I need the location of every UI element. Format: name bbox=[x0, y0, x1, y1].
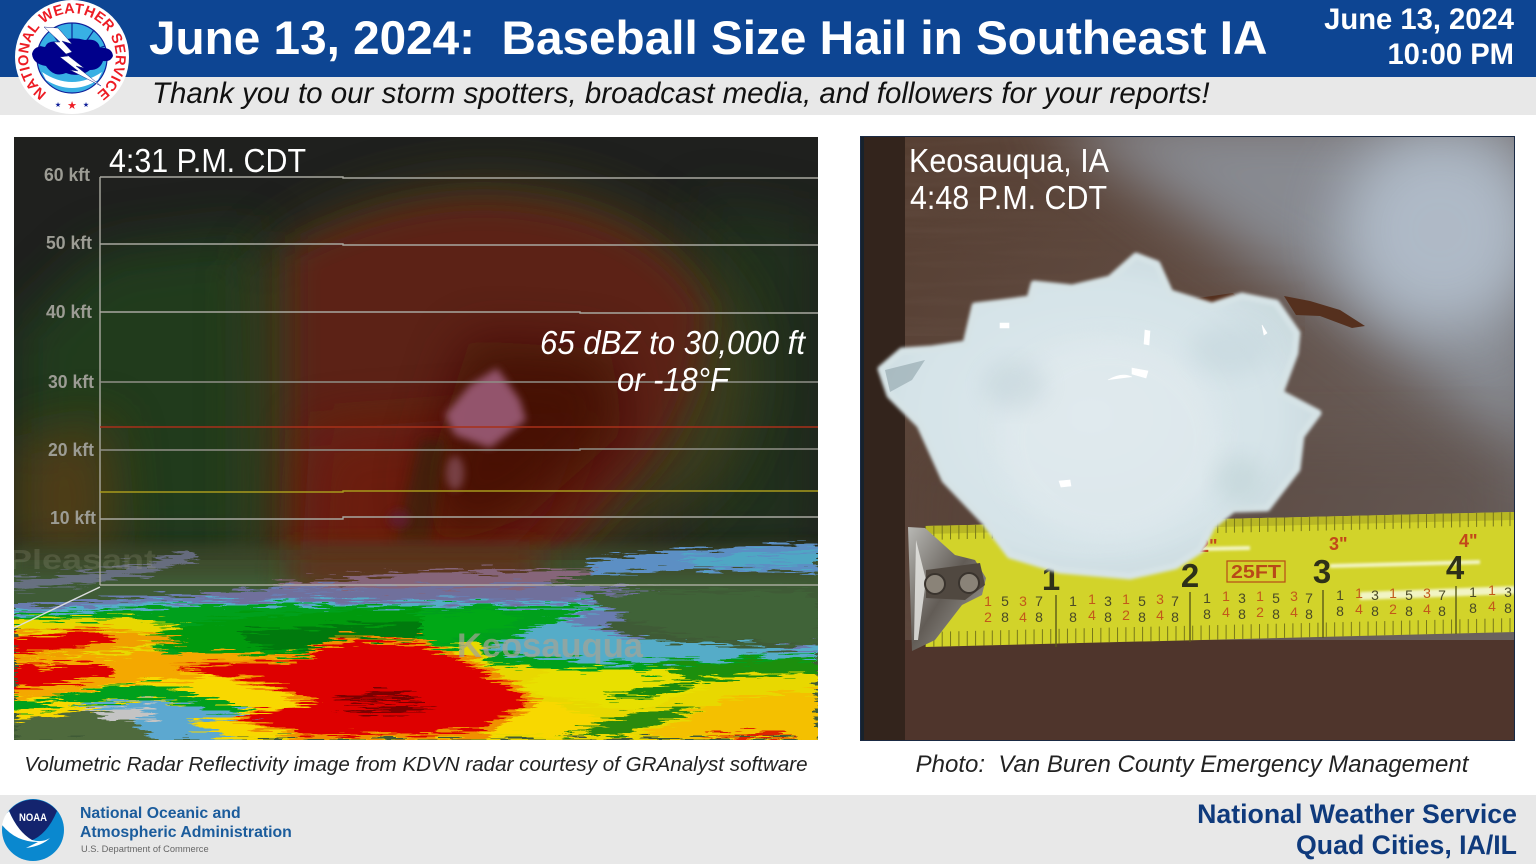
radar timestamp: 4:31 P.M. CDT bbox=[109, 142, 306, 179]
tape fractions: 8888888888888888 bbox=[1001, 600, 1512, 625]
altitude labels: 20 kft bbox=[48, 440, 94, 460]
hailstone bbox=[881, 256, 1318, 576]
tape inch marks: 4" bbox=[1459, 531, 1478, 551]
altitude grid bbox=[14, 177, 818, 628]
photo location and time: 4:48 P.M. CDT bbox=[910, 179, 1107, 216]
radar annotation: or -18°F bbox=[617, 361, 731, 398]
tape inch numbers: 2 bbox=[1181, 557, 1199, 594]
volumetric reflectivity haze bbox=[14, 180, 818, 590]
tape inch marks: 2" bbox=[1199, 536, 1218, 556]
icon: NOAA logo: NOAA bbox=[19, 812, 47, 824]
tape fractions: 131131131131 bbox=[984, 582, 1496, 609]
altitude labels: 30 kft bbox=[48, 372, 94, 392]
subtitle bar bbox=[0, 77, 1536, 115]
panel: radar reflectivity image bbox=[14, 137, 818, 740]
title: June 13, 2024: Baseball Size Hail in Southeast IA bbox=[149, 12, 1267, 65]
photo frame bbox=[860, 136, 1514, 740]
panel: hailstone photo bbox=[860, 136, 1515, 741]
tape inch numbers bbox=[1042, 549, 1465, 597]
tape fractions bbox=[984, 582, 1512, 625]
tape fractions: 5713571357135713 bbox=[1001, 584, 1512, 609]
footer bar bbox=[0, 795, 1536, 864]
tape inch numbers: 4 bbox=[1446, 549, 1465, 586]
icon: National Weather Service logo: ★ bbox=[55, 101, 61, 109]
photo location and time: Keosauqua, IA bbox=[909, 142, 1109, 179]
tape tick marks bbox=[925, 512, 1515, 540]
header banner bbox=[0, 0, 1536, 77]
tape inch marks bbox=[1199, 531, 1478, 556]
radar caption: Volumetric Radar Reflectivity image from KDVN radar courtesy of GRAnalyst software bbox=[24, 753, 808, 776]
radar annotation bbox=[540, 324, 807, 398]
icon: NOAA logo bbox=[2, 799, 64, 861]
office name: National Weather Service Quad Cities, IA/IL bbox=[1197, 799, 1517, 860]
photo location and time bbox=[909, 142, 1109, 216]
subtitle: Thank you to our storm spotters, broadcast media, and followers for your reports! bbox=[152, 77, 1210, 110]
base reflectivity ground map bbox=[14, 543, 820, 742]
altitude labels: 10 kft bbox=[50, 508, 96, 528]
tape measure bbox=[908, 512, 1515, 651]
tape 25FT badge: 25FT bbox=[1231, 562, 1281, 582]
tape 25FT badge bbox=[1227, 561, 1285, 582]
NOAA agency name: National Oceanic and Atmospheric Administration bbox=[80, 805, 292, 840]
tape metal hook bbox=[908, 527, 986, 651]
tape inch numbers: 1 bbox=[1042, 560, 1060, 597]
icon: National Weather Service logo: NATIONAL WEATHER SERVICE bbox=[18, 3, 126, 100]
altitude labels bbox=[44, 165, 96, 528]
altitude labels: 60 kft bbox=[44, 165, 90, 185]
tape inch marks: 3" bbox=[1329, 534, 1348, 554]
core of high reflectivity bbox=[388, 368, 526, 528]
altitude labels: 50 kft bbox=[46, 233, 92, 253]
icon: National Weather Service logo: ★ bbox=[67, 99, 77, 112]
icon: National Weather Service logo: ★ bbox=[83, 101, 89, 109]
date and time: June 13, 2024 10:00 PM bbox=[1324, 4, 1514, 71]
photo caption: Photo: Van Buren County Emergency Management bbox=[916, 751, 1468, 778]
tape inch numbers: 3 bbox=[1313, 553, 1331, 590]
department of commerce line: U.S. Department of Commerce bbox=[81, 844, 209, 854]
map label: Keosauqua: Keosauqua bbox=[457, 627, 644, 665]
radar backdrop bbox=[14, 137, 818, 740]
wooden table bbox=[860, 110, 1536, 741]
tape fractions: 244244244244 bbox=[984, 598, 1496, 625]
radar annotation: 65 dBZ to 30,000 ft bbox=[540, 324, 807, 361]
altitude labels: 40 kft bbox=[46, 302, 92, 322]
